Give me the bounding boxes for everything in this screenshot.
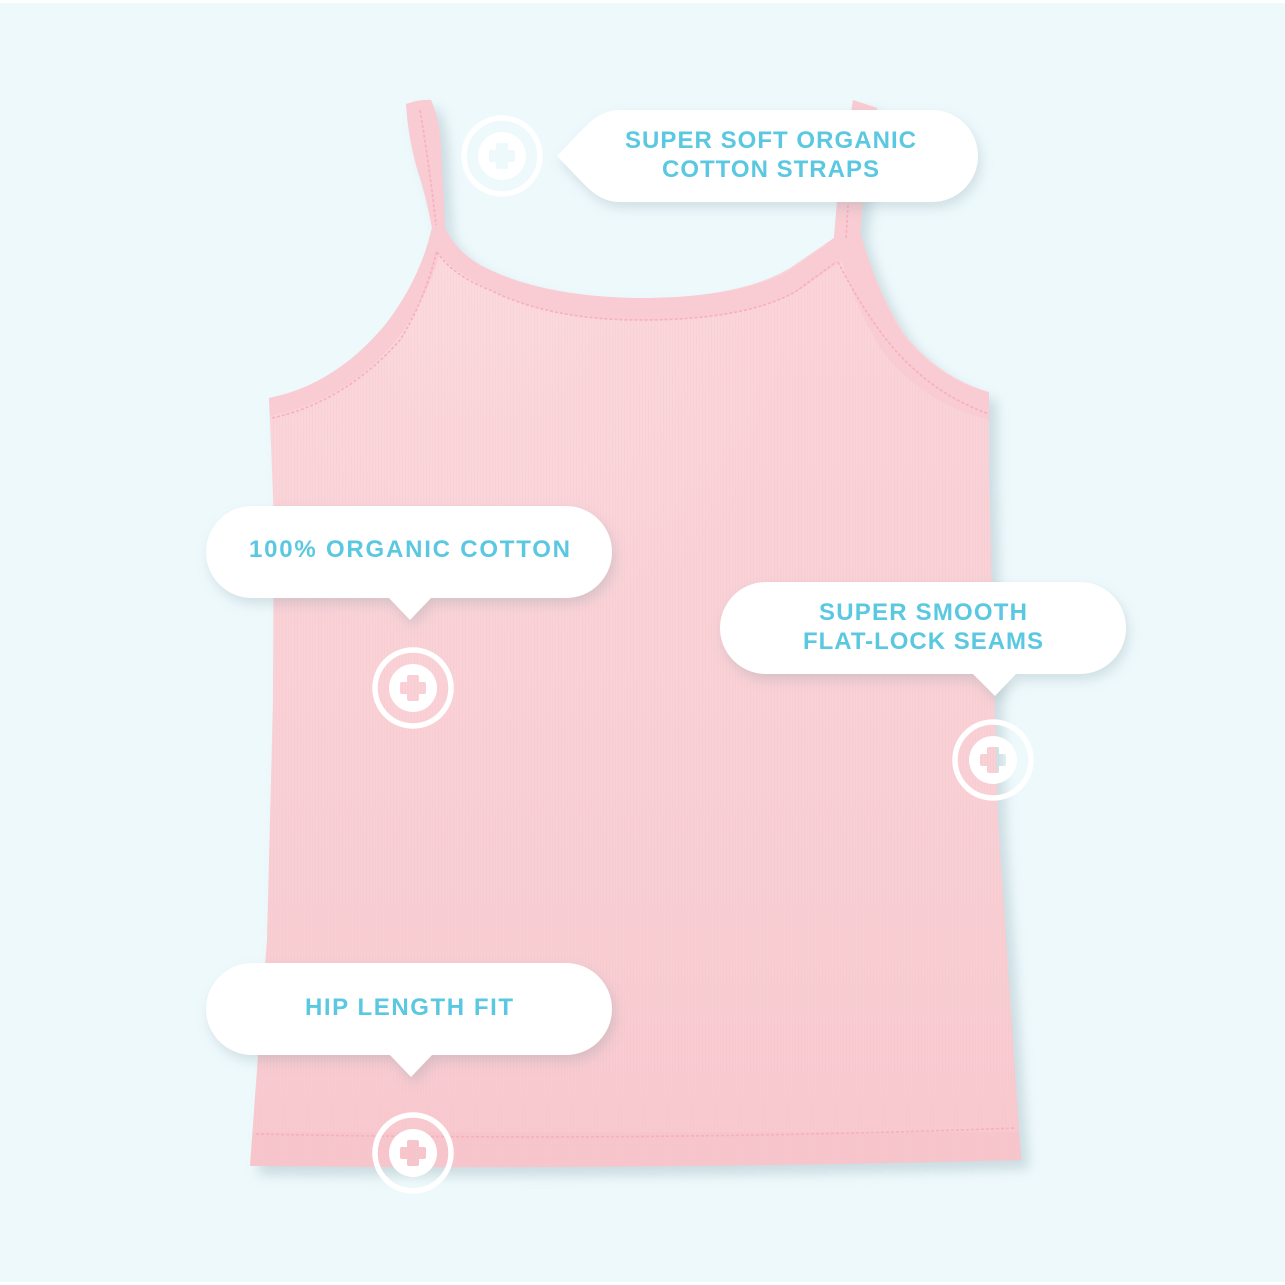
armhole bindings <box>258 232 432 405</box>
callout: 100% organic cotton <box>206 506 612 620</box>
callout: super soft organic cotton straps: COTTON STRAPS <box>662 156 879 183</box>
callout: super soft organic cotton straps: SUPER SOFT ORGANIC <box>625 127 916 154</box>
straps <box>400 90 885 250</box>
icon: plus marker fabric <box>375 650 451 726</box>
callout: super smooth flat-lock seams: SUPER SMOOTH <box>819 599 1027 626</box>
icon: plus marker straps <box>464 118 540 194</box>
garment shadow <box>258 109 1029 1176</box>
hem shade <box>240 1132 1040 1172</box>
callout: 100% organic cotton: 100% ORGANIC COTTON <box>249 536 570 563</box>
callout: super soft organic cotton straps <box>557 110 978 202</box>
camisole body <box>250 100 1021 1167</box>
callout: super smooth flat-lock seams <box>720 582 1126 696</box>
neckline binding <box>437 232 838 309</box>
fabric sheen and rib texture <box>240 90 1040 1180</box>
icon: plus marker seams <box>955 722 1031 798</box>
callout: hip length fit: HIP LENGTH FIT <box>305 994 513 1021</box>
callout: super smooth flat-lock seams: FLAT-LOCK SEAMS <box>803 628 1043 655</box>
icon: plus marker hip length <box>375 1115 451 1191</box>
garment: pink camisole <box>240 90 1040 1180</box>
callout: hip length fit <box>206 963 612 1077</box>
stitching <box>256 110 1016 1137</box>
